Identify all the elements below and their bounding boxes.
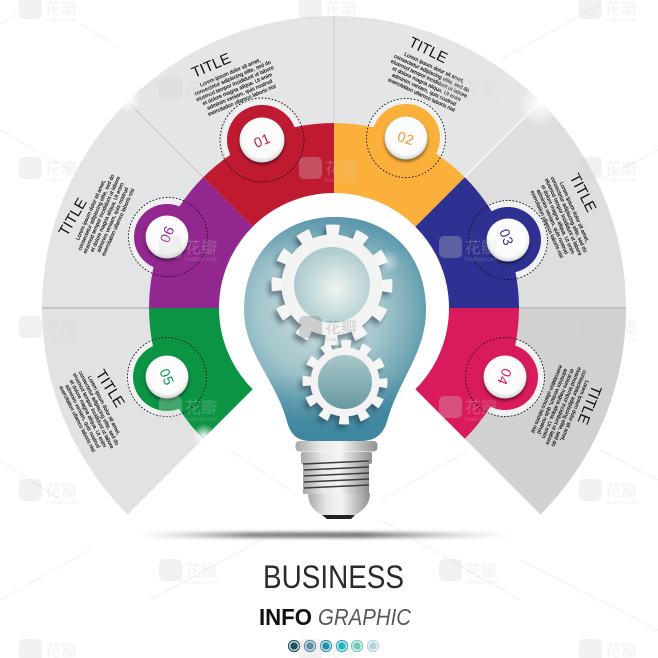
heading: title 02: TITLE xyxy=(406,34,450,67)
text block 02: eiusmod tempor incididunt ut labore xyxy=(390,59,468,100)
text block 04: Lorem ipsum dolor sit amet, xyxy=(558,379,589,442)
segment 06 purple xyxy=(149,177,253,308)
sector 06 background xyxy=(42,102,203,308)
badge 05 xyxy=(128,338,206,416)
heading: title 01: TITLE xyxy=(189,50,233,82)
text block 04: et dolore magna aliqua. Ut enim xyxy=(540,368,575,440)
text block 03: exercitation ullamco laboris nisi xyxy=(529,190,564,259)
watermark logos and text: huaban.com xyxy=(185,257,218,263)
badge 01 xyxy=(220,98,304,182)
panel: grey outer sectors xyxy=(42,16,626,514)
text block 06: et dolore magna aliqua. Ut enim xyxy=(90,182,126,253)
badge 02 xyxy=(366,98,446,178)
heading: title 04: TITLE xyxy=(574,383,605,427)
segment 01 red xyxy=(203,123,334,227)
badge 02: 02 xyxy=(396,128,416,148)
text block 01: consectetur adipiscing elite, sed do xyxy=(194,60,272,98)
heading: title 05: TITLE xyxy=(92,367,128,410)
watermark logos and text: huaban.com xyxy=(185,98,218,104)
text block 05: consectetur adipiscing elite, sed do xyxy=(77,370,120,447)
segment 04 pink xyxy=(415,308,519,439)
text block 02: consectetur adipiscing elite, sed do xyxy=(393,54,470,94)
badge 03: 03 xyxy=(496,227,517,248)
watermark logos and text: 花瓣 xyxy=(45,160,77,178)
watermark logos and text: huaban.com xyxy=(45,18,78,24)
text block 04: adminim veniam, quis nostrud xyxy=(535,368,568,435)
sector 05 background xyxy=(42,308,203,514)
text block 03: Lorem ipsum dolor sit amet, xyxy=(558,181,590,243)
text block 05: Lorem ipsum dolor sit amet, xyxy=(86,375,121,436)
sector 02 background xyxy=(334,16,540,177)
large gear xyxy=(277,230,387,340)
badge 05: 05 xyxy=(156,366,178,388)
text block 02: et dolore magna aliqua. Ut enim xyxy=(391,66,462,103)
text block 01: Lorem ipsum dolor sit amet, xyxy=(199,58,262,89)
panel: coloured ring segments xyxy=(149,123,519,439)
text block 03: eiusmod tempor incididunt ut labore xyxy=(543,178,583,257)
text block 01: exercitation ullamco laboris nisi xyxy=(207,84,277,118)
watermark logos and text: huaban.com xyxy=(605,178,638,184)
watermark logos and text: 花瓣 xyxy=(465,399,497,417)
text block 02 xyxy=(382,48,473,116)
text block 06: Lorem ipsum dolor sit amet, xyxy=(75,179,107,241)
badge 04: 04 xyxy=(494,366,515,388)
watermark logos and text: 花瓣 xyxy=(45,482,77,500)
watermark logos and text: 花瓣 xyxy=(605,160,637,178)
watermark logos and text: huaban.com xyxy=(325,18,358,24)
text block 04: consectetur adipiscing elite, sed do xyxy=(549,369,587,447)
watermark logos and text: huaban.com xyxy=(465,257,498,263)
watermark logos and text: huaban.com xyxy=(605,18,638,24)
text block 03: et dolore magna aliqua. Ut enim xyxy=(539,184,576,256)
text block 05: eiusmod tempor incididunt ut labore xyxy=(71,372,115,450)
badge 01: 01 xyxy=(251,130,273,151)
heading: INFO: INFO xyxy=(259,604,312,630)
small gear xyxy=(307,344,383,420)
sector 04 background xyxy=(465,308,626,514)
watermark logos and text: 花瓣 xyxy=(185,239,217,257)
watermark logos and text: huaban.com xyxy=(185,417,218,423)
icon: light bulb xyxy=(244,217,426,519)
watermark logos and text: 花瓣 xyxy=(185,399,217,417)
watermark logos and text: 花瓣 xyxy=(325,0,357,18)
text block 04: exercitation ullamco laboris nisi xyxy=(529,364,563,434)
watermark logos and text: 花瓣 xyxy=(465,80,497,98)
text block 02: exercitation ullamco laboris nisi xyxy=(387,77,456,114)
sector 03 background xyxy=(465,102,626,308)
bulb glass xyxy=(244,217,426,441)
badge 03 xyxy=(468,200,548,280)
text block 06: exercitation ullamco laboris nisi xyxy=(101,188,136,257)
text block 04: eiusmod tempor incididunt ut labore xyxy=(544,366,582,446)
watermark logos and text: huaban.com xyxy=(325,178,358,184)
text block 01: eiusmod tempor incididunt ut labore xyxy=(195,65,275,103)
watermark logos and text: 花瓣 xyxy=(185,562,217,580)
heading: title 03: TITLE xyxy=(566,171,599,215)
watermark logos and text: huaban.com xyxy=(45,500,78,506)
watermark logos and text: huaban.com xyxy=(45,178,78,184)
text block 03: adminim veniam, quis nostrud xyxy=(535,189,569,255)
watermark logos and text: 花瓣 xyxy=(465,239,497,257)
watermark logos and text: huaban.com xyxy=(465,98,498,104)
watermark logos and text: 花瓣 xyxy=(45,319,77,337)
watermark logos and text: huaban.com xyxy=(465,417,498,423)
highlight glares xyxy=(114,83,562,448)
watermark logos and text: huaban.com xyxy=(45,337,78,343)
watermark logos and text: 花瓣 xyxy=(45,0,77,18)
text block 03 xyxy=(527,173,594,264)
watermark logos and text: huaban.com xyxy=(605,500,638,506)
watermark logos and text: huaban.com xyxy=(325,337,358,343)
badge 06: 06 xyxy=(156,223,178,245)
watermark logos and text: huaban.com xyxy=(465,580,498,586)
text block 02: Lorem ipsum dolor sit amet, xyxy=(403,52,465,85)
watermark logos and text: 花瓣 xyxy=(465,562,497,580)
floor shadow xyxy=(140,532,510,538)
segment 02 orange xyxy=(334,123,465,227)
heading: GRAPHIC: GRAPHIC xyxy=(318,604,411,630)
text block 06: consectetur adipiscing elite, sed do xyxy=(77,174,116,252)
watermark logos and text: huaban.com xyxy=(185,580,218,586)
sector divider lines xyxy=(42,16,626,308)
badge 06 xyxy=(128,198,208,276)
badge 04 xyxy=(466,338,544,416)
heading: BUSINESS: BUSINESS xyxy=(263,559,404,595)
light halos behind number badges xyxy=(128,99,547,416)
watermark logos and text: 花瓣 xyxy=(325,160,357,178)
pagination dots xyxy=(288,640,378,652)
watermark logos and text: 花瓣 xyxy=(185,80,217,98)
watermark logos and text: 花瓣 xyxy=(605,482,637,500)
bulb screw base xyxy=(296,441,378,519)
text block 05: et dolore magna aliqua. Ut enim xyxy=(68,379,107,449)
watermark logos and text: huaban.com xyxy=(605,337,638,343)
watermark logos and text: 花瓣 xyxy=(605,319,637,337)
sector 01 background xyxy=(128,16,334,177)
text block 06 xyxy=(71,171,138,262)
segment 03 blue xyxy=(415,177,519,308)
text block 01: et dolore magna aliqua. Ut enim xyxy=(202,72,274,107)
text block 06: adminim veniam, quis nostrud xyxy=(96,187,130,253)
text block 06: eiusmod tempor incididunt ut labore xyxy=(82,176,122,255)
text block 01: adminim veniam, quis nostrud xyxy=(206,79,274,112)
text block 01 xyxy=(191,54,282,120)
text block 05: exercitation ullamco laboris nisi xyxy=(57,385,96,453)
text block 04 xyxy=(527,359,593,450)
text block 03: consectetur adipiscing elite, sed do xyxy=(549,176,588,254)
watermark logos and text: 花瓣 xyxy=(325,319,357,337)
segment 05 green xyxy=(149,308,253,439)
text block 05: adminim veniam, quis nostrud xyxy=(63,384,101,449)
text block 02: adminim veniam, quis nostrud xyxy=(391,72,457,108)
text block 05 xyxy=(55,367,125,458)
watermark logos and text: 花瓣 xyxy=(605,0,637,18)
heading: title 06: TITLE xyxy=(56,195,91,239)
